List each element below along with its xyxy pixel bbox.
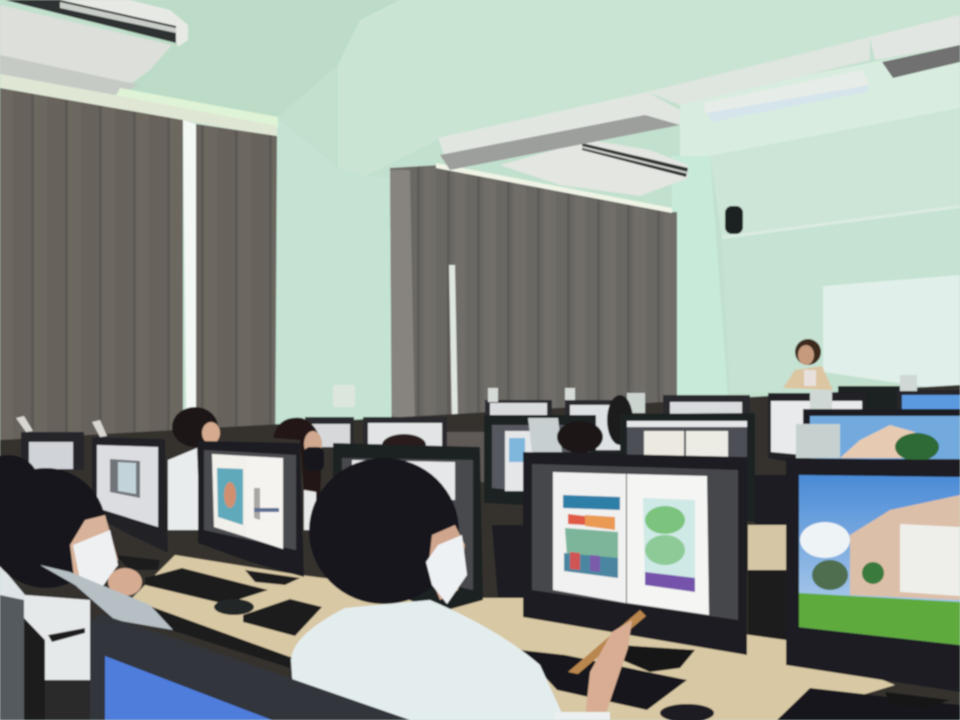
desks: [133, 525, 895, 720]
centre curtain: [390, 163, 677, 470]
centre air conditioner: [500, 140, 688, 196]
person with long hair: [273, 418, 324, 530]
right monitor with campus wallpaper: [786, 458, 960, 708]
monitor with poster left: [198, 441, 304, 585]
foreground monitors bottom left: [0, 595, 410, 720]
keyboards and mouse: [145, 568, 960, 720]
left curtain rail and curtains: [0, 74, 278, 470]
monitor behind foreground person: [333, 443, 483, 612]
wall speaker: [725, 206, 743, 234]
presenter: [783, 339, 833, 390]
whiteboard: [823, 275, 960, 392]
monitor left far: [92, 437, 168, 570]
left student with mask: [0, 455, 173, 680]
monitor row middle: [484, 413, 755, 522]
foreground student with mask: [291, 458, 646, 720]
ceiling fixture far right: [870, 15, 960, 78]
monitor row back right: [768, 375, 960, 465]
person seated back left: [168, 407, 220, 530]
back floor and furniture: [0, 385, 960, 720]
left air conditioner: [0, 0, 188, 95]
ceiling light right: [703, 70, 870, 122]
main monitor with infographics: [523, 452, 747, 672]
distant monitors: [16, 386, 960, 470]
ceiling light fixture centre: [438, 37, 870, 170]
